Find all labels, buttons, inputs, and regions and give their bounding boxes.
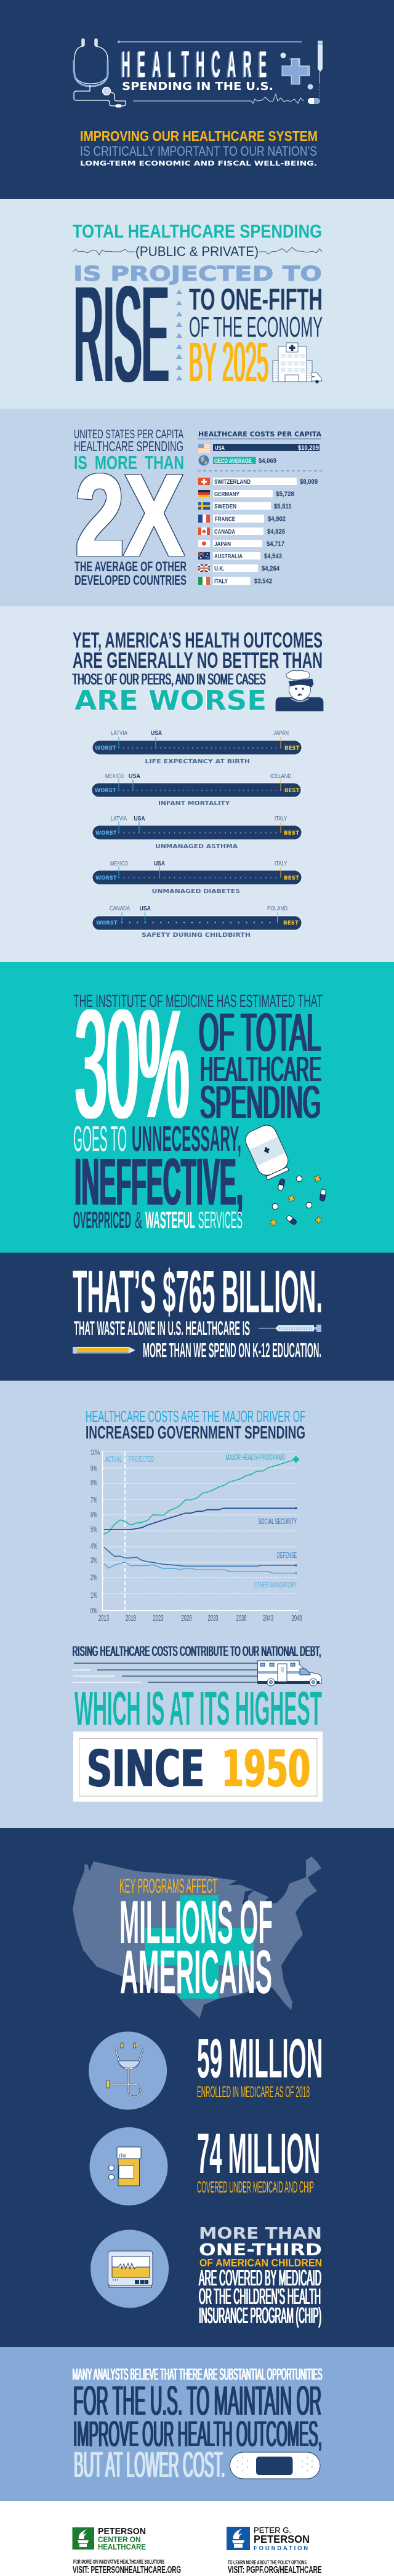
- panel: government spending and debt: [0, 1381, 394, 1828]
- row: USA: [198, 444, 320, 453]
- x axis labels: 2018: [126, 1613, 136, 1623]
- scale: infant mortality: MEXICO: [105, 772, 124, 780]
- line: social security: [104, 1507, 297, 1530]
- scale: unmanaged diabetes: UNMANAGED DIABETES: [151, 888, 240, 895]
- row: Switzerland: $8,009: [300, 478, 318, 486]
- scale: infant mortality: WORST: [95, 788, 116, 794]
- scale: life expectancy at birth: LIFE EXPECTANCY AT BIRTH: [145, 758, 250, 765]
- x axis labels: [98, 1613, 302, 1623]
- panel: 765 billion: [0, 1253, 394, 1381]
- heading: total healthcare spending: TOTAL HEALTHCARE SPENDING: [73, 221, 322, 242]
- chart: spending as share of GDP: [90, 1448, 302, 1623]
- figure: 2X: 2X: [75, 452, 183, 579]
- row: OECD average: $4,069: [259, 457, 276, 465]
- icon: bandage: [230, 2452, 320, 2479]
- y axis labels: [90, 1448, 100, 1615]
- text: the average of other developed countries: DEVELOPED COUNTRIES: [74, 572, 187, 588]
- line: other mandatory: OTHER MANDATORY: [254, 1580, 297, 1589]
- icon: prescription bottle: [108, 2147, 141, 2186]
- x axis labels: 2023: [153, 1613, 164, 1623]
- stat: one-third of children: ONE-THIRD: [199, 2241, 322, 2260]
- callout: since 1950: [73, 1731, 323, 1802]
- row: Italy: ITALY: [214, 577, 228, 585]
- row: Sweden: [198, 502, 292, 510]
- panel: total spending: RISE: [74, 258, 169, 410]
- text: is projected to: IS PROJECTED TO: [73, 262, 322, 286]
- row: Japan: $4,717: [267, 540, 284, 548]
- stat: 59 million: [89, 2028, 323, 2110]
- scale: safety during childbirth: USA: [139, 905, 151, 912]
- subheading with heartbeat lines: (PUBLIC & PRIVATE): [135, 244, 259, 259]
- text: are worse: ARE WORSE: [74, 685, 267, 716]
- line: defense: DEFENSE: [277, 1551, 297, 1560]
- panel: per capita comparison: [0, 409, 394, 606]
- icon: syringe: [318, 41, 323, 97]
- row: Italy: $3,542: [254, 577, 272, 585]
- x axis labels: 2013: [98, 1613, 109, 1623]
- y axis labels: 6%: [90, 1510, 97, 1519]
- stat: one-third of children: MORE THAN: [199, 2225, 322, 2243]
- row: France: FRANCE: [215, 516, 235, 523]
- panel: header: [0, 0, 394, 199]
- row: France: [198, 515, 286, 523]
- panel: 30 percent: 30%: [75, 978, 189, 1150]
- y axis labels: 5%: [90, 1525, 97, 1534]
- text: footer right: [228, 2559, 322, 2575]
- y axis labels: 2%: [90, 1573, 97, 1582]
- text: footer left: FOR MORE ON INNOVATIVE HEALTHCARE SOLUTIONS: [73, 2559, 164, 2565]
- chart: healthcare costs per capita: HEALTHCARE COSTS PER CAPITA: [198, 430, 321, 438]
- row: Sweden: $5,511: [274, 503, 292, 510]
- text: overpriced and wasteful services: WASTEFUL: [145, 1208, 195, 1234]
- logo: Peterson Center on Healthcare: [73, 2527, 146, 2551]
- x axis labels: 2048: [292, 1613, 302, 1623]
- arrows up: [176, 289, 182, 380]
- map: United States: [73, 1856, 321, 2018]
- text: footer left: [73, 2559, 181, 2575]
- speed lines: [73, 1663, 257, 1682]
- row: OECD average: [198, 455, 276, 465]
- series labels: actual and projected: ACTUAL: [105, 1455, 122, 1464]
- chart: healthcare costs per capita: [198, 430, 322, 585]
- callout: since 1950: SINCE: [87, 1740, 204, 1799]
- scale: infant mortality: INFANT MORTALITY: [158, 800, 230, 807]
- scale: safety during childbirth: CANADA: [110, 905, 130, 912]
- text: footer right: TO LEARN MORE ABOUT THE POLICY OPTIONS: [228, 2559, 307, 2566]
- scale: safety during childbirth: SAFETY DURING CHILDBIRTH: [142, 932, 251, 939]
- intro text: IS CRITICALLY IMPORTANT TO OUR NATION’S: [80, 143, 317, 159]
- scale: safety during childbirth: BEST: [283, 920, 299, 926]
- heading: health outcomes: [73, 628, 323, 688]
- row: U.K.: U.K.: [214, 565, 225, 572]
- scale: unmanaged asthma: ITALY: [275, 815, 287, 822]
- x axis labels: 2038: [236, 1613, 246, 1623]
- row: Australia: $4,543: [264, 553, 282, 560]
- row: Canada: [198, 528, 285, 536]
- row: Germany: GERMANY: [214, 491, 239, 498]
- scale: life expectancy at birth: LATVIA: [111, 729, 127, 737]
- icon: sick person: [276, 670, 323, 711]
- scale: infant mortality: ICELAND: [270, 772, 291, 780]
- scale: life expectancy at birth: JAPAN: [273, 729, 289, 737]
- series labels: actual and projected: PROJECTED: [129, 1455, 154, 1464]
- intro text: IMPROVING OUR HEALTHCARE SYSTEM: [80, 128, 318, 144]
- heading: key programs: KEY PROGRAMS AFFECT: [119, 1875, 217, 1897]
- scale: unmanaged diabetes: BEST: [284, 875, 299, 881]
- scale: unmanaged diabetes: ITALY: [275, 860, 287, 867]
- text: overpriced and wasteful services: OVERPRICED: [73, 1208, 131, 1234]
- icon: teal cross: [145, 1895, 254, 1999]
- text: footer right: VISIT: PGPF.ORG/HEALTHCARE: [228, 2565, 322, 2575]
- scale: life expectancy at birth: WORST: [95, 745, 116, 752]
- y axis labels: 8%: [90, 1478, 97, 1487]
- icon: stethoscope: [74, 39, 126, 107]
- scale: unmanaged asthma: USA: [134, 815, 145, 822]
- scale: life expectancy at birth: USA: [151, 729, 162, 737]
- row: USA: USA: [215, 444, 225, 452]
- logo: Peter G. Peterson Foundation: FOUNDATION: [254, 2545, 310, 2552]
- scale: life expectancy at birth: [92, 729, 302, 765]
- x axis labels: 2043: [263, 1613, 273, 1623]
- intro text: LONG-TERM ECONOMIC AND FISCAL WELL-BEING.: [80, 159, 317, 167]
- x axis labels: 2028: [181, 1613, 192, 1623]
- line: defense: [104, 1547, 297, 1567]
- row: U.K.: $4,264: [262, 565, 280, 572]
- row: France: $4,902: [268, 516, 286, 523]
- row: Canada: $4,826: [267, 528, 285, 536]
- icon: syringe: [259, 1325, 321, 1332]
- subheading with heartbeat lines: [73, 244, 322, 259]
- y axis labels: 3%: [90, 1555, 97, 1565]
- row: Germany: $5,728: [276, 491, 294, 498]
- icon: pencil: [73, 1347, 135, 1354]
- panel: health outcomes: [0, 606, 394, 962]
- line: major health programs: MAJOR HEALTH PROGRAMS: [225, 1453, 285, 1462]
- x axis labels: 2033: [208, 1613, 218, 1623]
- icon: heart monitor: [108, 2251, 153, 2287]
- text: footer left: VISIT: PETERSONHEALTHCARE.ORG: [73, 2565, 181, 2575]
- stat: one-third of children: [90, 2225, 322, 2328]
- logo: Peter G. Peterson Foundation: PETER G.: [254, 2526, 291, 2535]
- icon: spilled pill bottle: [243, 1122, 326, 1226]
- scale: unmanaged diabetes: MEXICO: [110, 860, 128, 867]
- series labels: actual and projected: [105, 1455, 154, 1464]
- row: Germany: [198, 490, 294, 498]
- icon: medical cross: [282, 58, 310, 84]
- y axis labels: 4%: [90, 1541, 97, 1551]
- text: the average of other developed countries: THE AVERAGE OF OTHER: [74, 559, 187, 574]
- scale: unmanaged asthma: BEST: [284, 830, 299, 837]
- callout: since 1950: 1950: [222, 1740, 310, 1799]
- text: goes to unnecessary: GOES TO: [73, 1119, 127, 1159]
- scale: unmanaged asthma: UNMANAGED ASTHMA: [155, 843, 238, 850]
- scale: infant mortality: USA: [129, 772, 140, 780]
- logo: Peterson Center on Healthcare: CENTER ON: [98, 2535, 140, 2544]
- panel: total spending: [0, 199, 394, 410]
- top rule: [118, 41, 302, 43]
- stat: one-third of children: OF AMERICAN CHILDREN: [199, 2257, 322, 2269]
- panel: 30 percent: SERVICES: [198, 1208, 243, 1234]
- heading: key programs: [119, 1875, 273, 2007]
- scale: infant mortality: [92, 772, 301, 807]
- text: united states per capita: IS MORE THAN: [74, 452, 184, 473]
- y axis labels: 7%: [90, 1495, 97, 1504]
- text: overpriced and wasteful services: &: [135, 1208, 142, 1234]
- y axis labels: 0%: [90, 1606, 97, 1615]
- scale: unmanaged diabetes: WORST: [95, 875, 117, 881]
- panel: footer: [0, 2501, 394, 2576]
- text: the average of other developed countries: [74, 559, 187, 588]
- heartbeat line: [133, 94, 304, 103]
- logo: Peterson Center on Healthcare: HEALTHCARE: [98, 2542, 146, 2551]
- y axis labels: 1%: [90, 1591, 97, 1600]
- y axis labels: 10%: [90, 1448, 100, 1457]
- scale: infant mortality: BEST: [284, 788, 300, 794]
- text: maintain or improve: [73, 2378, 322, 2454]
- text: united states per capita: [74, 428, 184, 473]
- row: OECD average: OECD AVERAGE: [214, 457, 252, 465]
- row: Sweden: SWEDEN: [214, 503, 236, 510]
- icon: ambulance: [257, 1661, 321, 1686]
- scale: unmanaged asthma: [92, 815, 302, 850]
- text: of total healthcare spending: [199, 1003, 321, 1128]
- scale: unmanaged diabetes: USA: [154, 860, 165, 867]
- row: Switzerland: SWITZERLAND: [214, 478, 251, 486]
- panel: 30 percent: [0, 962, 394, 1253]
- line: social security: SOCIAL SECURITY: [259, 1517, 297, 1526]
- row: Canada: CANADA: [214, 528, 235, 536]
- intro text: [80, 128, 318, 167]
- panel: key programs: [0, 1828, 394, 2347]
- logo: Peter G. Peterson Foundation: [227, 2526, 310, 2552]
- stat: 74 million: [90, 2122, 320, 2205]
- scale: safety during childbirth: WORST: [96, 920, 118, 926]
- y axis labels: 9%: [90, 1464, 97, 1473]
- row: Japan: JAPAN: [214, 540, 231, 548]
- panel: lower cost: [0, 2347, 394, 2501]
- icon: pills: [281, 53, 320, 104]
- line: other mandatory: [104, 1562, 297, 1589]
- scale: life expectancy at birth: BEST: [284, 745, 300, 752]
- scale: safety during childbirth: [92, 905, 302, 939]
- row: Italy: [198, 577, 272, 585]
- row: U.K.: [198, 564, 280, 572]
- line: major health programs: [104, 1453, 299, 1535]
- scale: unmanaged asthma: WORST: [95, 830, 117, 837]
- scale: safety during childbirth: POLAND: [267, 905, 287, 912]
- row: Australia: AUSTRALIA: [214, 553, 243, 560]
- row: USA: $10,209: [298, 444, 319, 452]
- logo: Peter G. Peterson Foundation: PETERSON: [254, 2533, 310, 2545]
- subtitle: spending in the U.S.: SPENDING IN THE U.S.: [122, 80, 273, 93]
- row: Australia: [198, 552, 282, 560]
- scale: unmanaged diabetes: [92, 860, 302, 895]
- logo: Peterson Center on Healthcare: PETERSON: [98, 2527, 146, 2537]
- scale: unmanaged asthma: LATVIA: [111, 815, 127, 822]
- icon: stethoscope: [107, 2043, 142, 2097]
- row: Switzerland: [198, 478, 318, 486]
- icon: hospital and ambulance: [273, 343, 322, 383]
- text: united states per capita: UNITED STATES PER CAPITA: [74, 428, 183, 441]
- heading: government spending: [86, 1407, 305, 1443]
- row: Japan: [198, 540, 284, 548]
- text: united states per capita: HEALTHCARE SPENDING: [74, 438, 183, 454]
